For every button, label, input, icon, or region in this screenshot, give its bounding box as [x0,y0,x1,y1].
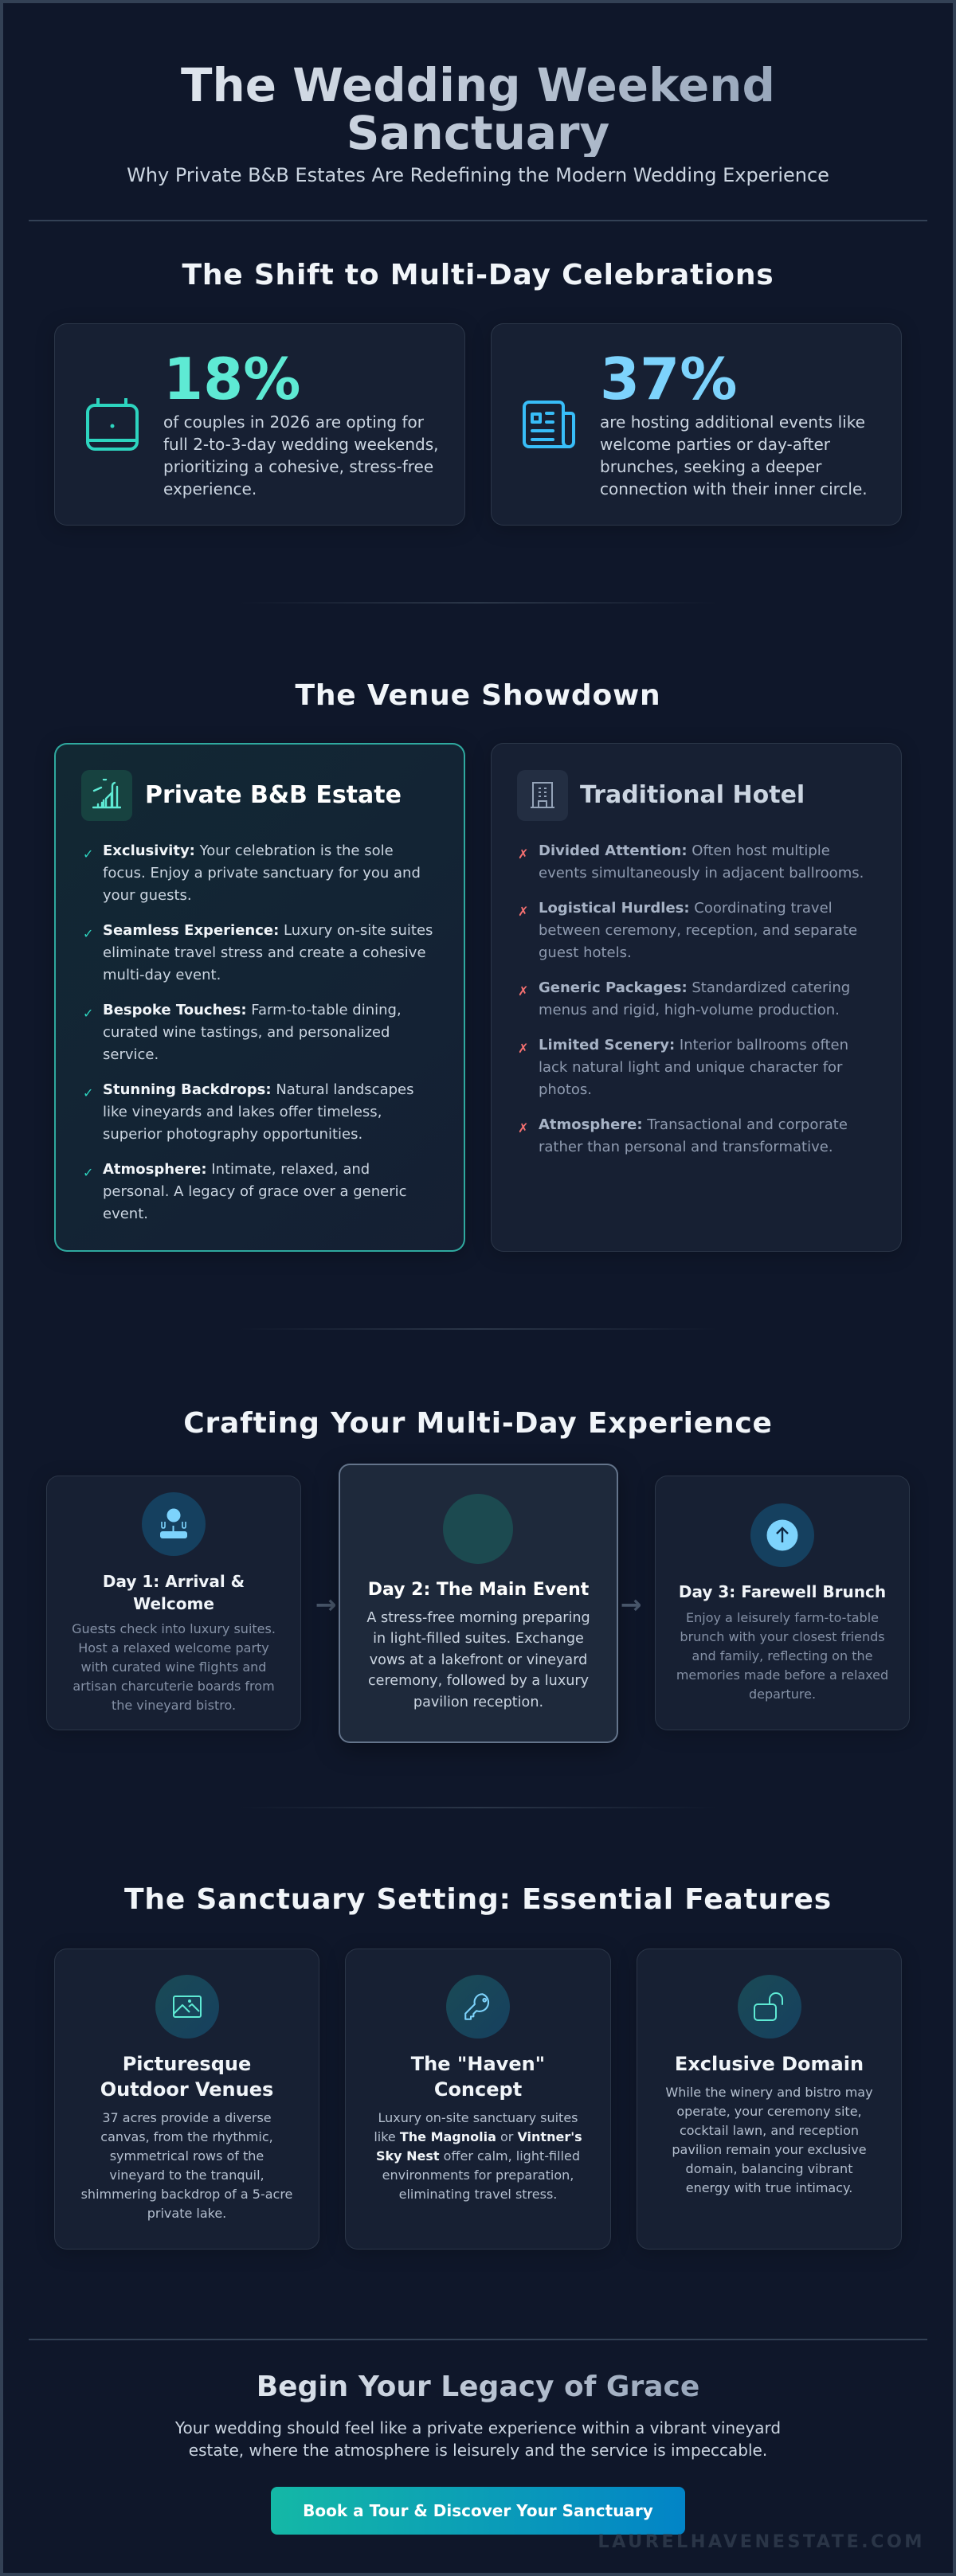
arrow: → [315,1589,336,1620]
feature description: pavilion remain your exclusive [672,2142,867,2156]
item: bespoke: curated wine tastings, and personalized [103,1024,390,1041]
icon: welcome [142,1492,206,1556]
item: logistical hurdles: Logistical Hurdles: Coordinating travel [539,900,833,917]
item: divided attention: events simultaneously in adjacent ballrooms. [539,865,864,881]
stat description: experience. [163,479,257,498]
feature description: environments for preparation, [382,2168,574,2182]
day description: in light-filled suites. Exchange [373,1631,584,1647]
stat card: 37% [491,323,902,526]
button: Book a Tour & Discover Your Sanctuary [303,2501,653,2520]
icon: main event [443,1494,513,1564]
day description: A stress-free morning preparing [366,1610,590,1626]
stat description: are hosting additional events like [600,412,865,432]
title [159,61,797,157]
day description: Guests check into luxury suites. [72,1621,276,1636]
item: exclusivity: focus. Enjoy a private sanctuary for you and [103,865,421,881]
panel title: Traditional Hotel [580,781,805,809]
panel: private estate: ✓ [83,1165,93,1180]
item: divided attention [518,842,864,881]
feature title: Exclusive Domain [675,2053,864,2075]
stat description: of couples in 2026 are opting for [163,412,424,432]
stat description: full 2-to-3-day wedding weekends, [163,435,439,454]
feature title: Concept [434,2078,522,2101]
panel: private estate [54,743,465,1252]
feature description [665,2085,873,2195]
icon: estate [81,770,132,821]
feature description: canvas, from the rhythmic, [100,2129,273,2144]
item: backdrops: superior photography opportunities. [103,1126,362,1143]
item: atmosphere [518,1116,848,1155]
stat description: welcome parties or day-after [600,435,830,454]
panel: traditional hotel: ✗ [518,904,528,919]
item: seamless: multi-day event. [103,967,221,983]
feature title: Outdoor Venues [100,2078,273,2101]
item: exclusivity: Exclusivity: Your celebration is the sole [103,842,394,859]
icon: landscape [155,1975,219,2039]
closing text: estate, where the atmosphere is leisurely and the service is impeccable. [189,2441,767,2460]
feature description: 37 acres provide a diverse [102,2110,272,2125]
icon: calendar [86,398,139,451]
day description [72,1621,276,1712]
feature description: vineyard to the tranquil, [109,2168,264,2182]
stat description: prioritizing a cohesive, stress-free [163,457,433,476]
watermark: LAURELHAVENESTATE.COM [598,2531,925,2552]
feature description: domain, balancing vibrant [686,2161,852,2175]
icon: open lock [738,1975,801,2039]
closing heading: Begin Your Legacy of Grace [257,2371,699,2403]
drawback list [518,842,864,1155]
feature description: cocktail lawn, and reception [680,2123,859,2137]
item: logistical hurdles: between ceremony, reception, and separate [539,922,857,939]
card: day 3 [655,1476,910,1730]
item: exclusivity [83,842,421,904]
item: generic packages: Generic Packages: Standardized catering [539,979,850,996]
item: limited scenery: Limited Scenery: Interior ballrooms often [539,1037,848,1053]
day description [676,1610,888,1701]
item: seamless: Seamless Experience: Luxury on-site suites [103,922,433,939]
day description: ceremony, followed by a luxury [368,1673,589,1689]
feature description: symmetrical rows of the [110,2148,264,2163]
day title: Day 2: The Main Event [368,1580,589,1600]
stat number: 37% [600,346,737,412]
feature title: Picturesque [123,2053,251,2075]
panel: traditional hotel: ✗ [518,1120,528,1136]
panel: traditional hotel: ✗ [518,1041,528,1056]
item: seamless: eliminate travel stress and create a cohesive [103,944,426,961]
item: atmosphere: Atmosphere: Transactional and corporate [539,1116,848,1133]
feature description: Luxury on-site sanctuary suites [378,2110,578,2125]
feature description: like The Magnolia or Vintner's [374,2129,582,2144]
item: atmosphere: personal. A legacy of grace over a generic [103,1183,407,1200]
item: backdrops: like vineyards and lakes offer timeless, [103,1104,382,1120]
item: generic packages [518,979,850,1018]
day description: memories made before a relaxed [676,1667,888,1682]
feature description: private lake. [147,2206,226,2220]
panel: private estate: ✓ [83,846,93,862]
day title [103,1572,245,1613]
panel: private estate: ✓ [83,1085,93,1100]
benefit list [83,842,433,1222]
stat description: connection with their inner circle. [600,479,868,498]
item: backdrops [83,1081,413,1143]
card: day 1 [46,1476,301,1730]
day description: with curated wine flights and [81,1659,266,1674]
item: limited scenery [518,1037,848,1098]
item: atmosphere [83,1161,407,1222]
panel: private estate: ✓ [83,926,93,941]
feature description [81,2110,292,2220]
card: exclusive domain [637,1949,902,2250]
day title: Welcome [133,1594,214,1613]
feature title [411,2053,545,2101]
day description: Host a relaxed welcome party [78,1640,269,1655]
icon: key [446,1975,510,2039]
item: atmosphere: Atmosphere: Intimate, relaxed, and [103,1161,370,1178]
button [271,2487,685,2535]
feature description: energy with true intimacy. [686,2180,852,2195]
day description [366,1610,590,1710]
heading: multi-day experience: Crafting Your Multi-Day Experience [183,1407,773,1440]
closing text: Your wedding should feel like a private experience within a vibrant vineyard [175,2418,781,2437]
item: limited scenery: photos. [539,1081,592,1098]
arrow: → [621,1589,641,1620]
feature description: While the winery and bistro may [665,2085,873,2099]
feature description: eliminating travel stress. [399,2187,557,2201]
item: bespoke [83,1002,402,1063]
item: logistical hurdles: guest hotels. [539,944,632,961]
panel: traditional hotel [491,743,902,1252]
day description: and family, reflecting on the [692,1648,872,1663]
stat number: 18% [163,346,300,412]
item: backdrops: Stunning Backdrops: Natural landscapes [103,1081,413,1098]
day title: Day 1: Arrival & [103,1572,245,1591]
card: day 2 [339,1464,618,1743]
day description: the vineyard bistro. [112,1698,236,1712]
day description: Enjoy a leisurely farm-to-table [686,1610,879,1624]
item: divided attention: Divided Attention: Often host multiple [539,842,830,859]
item: logistical hurdles [518,900,857,961]
panel: traditional hotel: ✗ [518,846,528,862]
feature description: operate, your ceremony site, [676,2104,862,2118]
heading: venue showdown: The Venue Showdown [295,679,661,712]
icon: hotel [517,770,568,821]
feature title: The "Haven" [411,2053,545,2075]
panel title: Private B&B Estate [145,781,402,809]
subtitle: Why Private B&B Estates Are Redefining the Modern Wedding Experience [127,164,829,186]
stat description [163,412,439,498]
feature title [100,2053,273,2101]
day description: brunch with your closest friends [680,1629,885,1644]
feature description [374,2110,582,2201]
stat description: brunches, seeking a deeper [600,457,821,476]
day title: Day 3: Farewell Brunch [679,1582,886,1601]
stat description [600,412,868,498]
item: limited scenery: lack natural light and unique character for [539,1059,842,1076]
icon: farewell [750,1503,814,1567]
day description: pavilion reception. [413,1695,543,1710]
title: Sanctuary [347,106,609,160]
item: generic packages: menus and rigid, high-volume production. [539,1002,840,1018]
item: exclusivity: your guests. [103,887,192,904]
card: outdoor venues [54,1949,319,2250]
panel: traditional hotel: ✗ [518,983,528,999]
heading: the shift: The Shift to Multi-Day Celebrations [182,259,774,291]
feature description: Sky Nest offer calm, light-filled [376,2148,580,2163]
card: haven concept [345,1949,611,2250]
day description: departure. [749,1687,816,1701]
item: bespoke: service. [103,1046,159,1063]
item: bespoke: Bespoke Touches: Farm-to-table dining, [103,1002,402,1018]
stat card: 18% [54,323,465,526]
item: atmosphere: rather than personal and transformative. [539,1139,833,1155]
item: seamless [83,922,433,983]
icon: newspaper [523,401,575,448]
day description: artisan charcuterie boards from [72,1679,275,1693]
heading: essential features: The Sanctuary Setting: Essential Features [124,1883,832,1916]
title: The Wedding Weekend [181,58,775,112]
day description: vows at a lakefront or vineyard [370,1652,587,1668]
feature description: shimmering backdrop of a 5-acre [81,2187,292,2201]
closing text [175,2418,781,2460]
panel: private estate: ✓ [83,1006,93,1021]
item: atmosphere: event. [103,1206,148,1222]
